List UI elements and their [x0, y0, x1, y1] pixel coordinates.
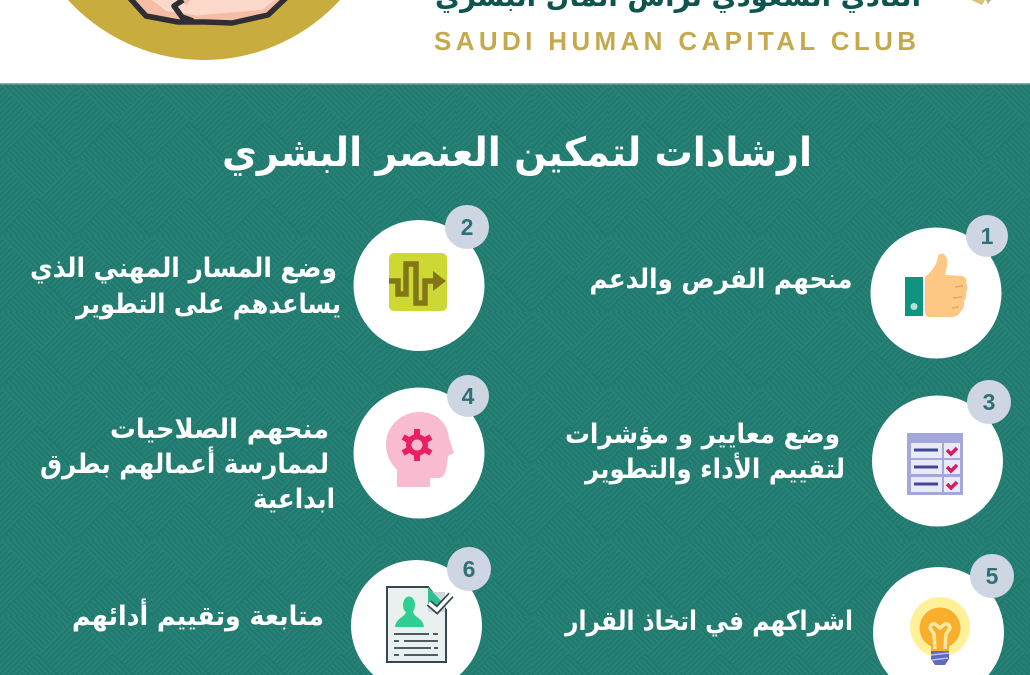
item 3 [565, 380, 1011, 526]
text 4: لممارسة أعمالهم بطرق [40, 446, 329, 480]
badge 6: 6 [463, 556, 475, 582]
text 2: يساعدهم على التطوير [74, 289, 341, 320]
badge 4: 4 [462, 383, 475, 409]
item 1 [590, 215, 1008, 358]
badge 5 [970, 554, 1014, 598]
text 4: منحهم الصلاحيات [110, 414, 329, 445]
badge 3 [967, 380, 1011, 424]
text 5: اشراكهم في اتخاذ القرار [563, 606, 853, 637]
item 6 [72, 547, 491, 675]
badge 4 [447, 375, 489, 417]
text 2: وضع المسار المهني الذي [30, 253, 337, 284]
logo mark fragment [971, 0, 991, 5]
icon: head with gear [386, 412, 454, 487]
text 3: وضع معايير و مؤشرات [565, 419, 840, 450]
badge 3: 3 [983, 389, 995, 415]
text 4: ابداعية [253, 484, 335, 515]
badge 1: 1 [981, 223, 994, 249]
logo: gold circle with clasped hands [20, 0, 388, 60]
icon: thumbs up [905, 254, 968, 317]
badge 5: 5 [986, 563, 999, 589]
text 1: منحهم الفرص والدعم [590, 264, 852, 295]
club name in English: SAUDI HUMAN CAPITAL CLUB [434, 26, 916, 56]
badge 2: 2 [461, 214, 473, 240]
badge 6 [447, 547, 491, 591]
text 3: لتقييم الأداء والتطوير [583, 452, 845, 485]
badge 2 [445, 205, 489, 249]
icon: checklist [907, 433, 963, 495]
header: white band [0, 0, 1030, 83]
text 6: متابعة وتقييم أدائهم [72, 598, 324, 632]
text 2 [30, 253, 341, 320]
item 4 [40, 375, 489, 518]
item 5 [563, 554, 1014, 675]
item 2 [30, 205, 489, 351]
icon: light bulb [910, 597, 970, 665]
text 4 [40, 414, 335, 515]
icon: profile document with check [387, 587, 451, 662]
title: ارشادات لتمكين العنصر البشري [222, 130, 812, 176]
text 3 [565, 419, 845, 485]
icon: path arrow [389, 253, 447, 311]
badge 1 [966, 215, 1008, 257]
